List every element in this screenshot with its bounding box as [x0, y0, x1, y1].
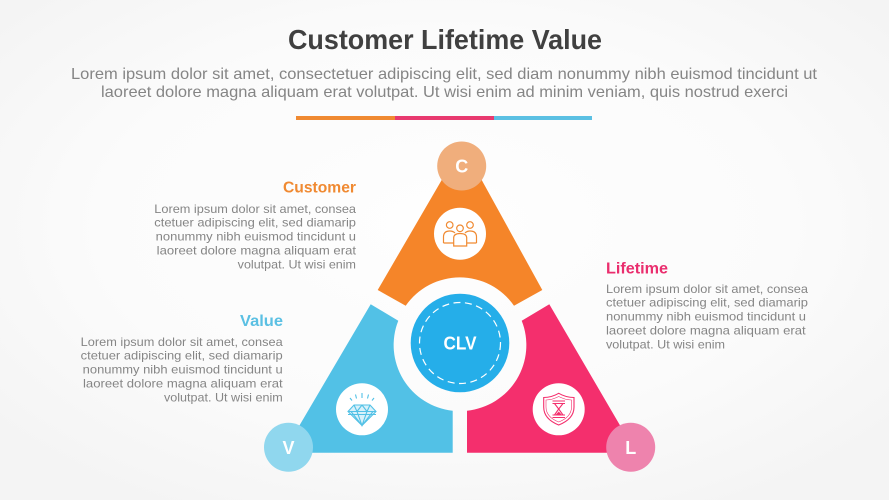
center CLV circle	[411, 294, 509, 392]
panel: pink lifetime segment	[467, 304, 636, 453]
text block: Lifetime	[606, 260, 808, 351]
text block: Value: nonummy nibh euismod tincidunt u	[83, 363, 283, 377]
title: Customer Lifetime Value	[288, 24, 602, 55]
text block: Value	[81, 313, 283, 404]
text block: Customer	[154, 180, 357, 272]
panel: orange customer segment	[378, 180, 542, 306]
panel: blue value segment	[283, 304, 453, 453]
icon: customers group	[434, 208, 486, 260]
text block: Lifetime: Lorem ipsum dolor sit amet, consea	[606, 282, 808, 296]
text block: Lifetime: volutpat. Ut wisi enim	[606, 337, 725, 351]
badge: C: C	[455, 156, 468, 176]
text block: Lifetime: laoreet dolore magna aliquam erat	[606, 324, 806, 338]
badge: V: V	[282, 438, 295, 458]
subtitle text	[71, 66, 818, 101]
text block: Value: Lorem ipsum dolor sit amet, consea	[81, 335, 283, 349]
text block: Customer: volutpat. Ut wisi enim	[238, 258, 356, 272]
text block: Customer: Lorem ipsum dolor sit amet, consea	[154, 202, 356, 216]
text block: Customer: nonummy nibh euismod tincidunt u	[156, 230, 356, 244]
tricolor divider	[296, 116, 592, 120]
text block: Customer: laoreet dolore magna aliquam erat	[157, 244, 357, 258]
icon: shield with hourglass	[533, 383, 585, 435]
badge: L	[606, 423, 655, 472]
text block: Lifetime: nonummy nibh euismod tincidunt u	[606, 310, 806, 324]
center CLV circle: CLV	[444, 334, 476, 354]
subtitle text: laoreet dolore magna aliquam erat volutpat. Ut wisi enim ad minim veniam, quis nostrud exerci	[101, 84, 788, 101]
text block: Customer: ctetuer adipiscing elit, sed diamarip	[154, 216, 356, 230]
text block: Value: volutpat. Ut wisi enim	[164, 390, 283, 404]
icon: diamond	[336, 383, 388, 435]
text block: Customer: Customer	[283, 180, 356, 196]
badge: V	[264, 423, 313, 472]
text block: Lifetime: ctetuer adipiscing elit, sed diamarip	[606, 296, 808, 310]
badge: C	[437, 142, 486, 190]
text block: Value: Value	[240, 313, 283, 330]
text block: Lifetime: Lifetime	[606, 260, 668, 278]
text block: Value: laoreet dolore magna aliquam erat	[83, 377, 283, 391]
badge: L: L	[625, 438, 636, 458]
subtitle text: Lorem ipsum dolor sit amet, consectetuer adipiscing elit, sed diam nonummy nibh euismod tincidunt ut	[71, 66, 818, 83]
text block: Value: ctetuer adipiscing elit, sed diamarip	[81, 349, 283, 363]
